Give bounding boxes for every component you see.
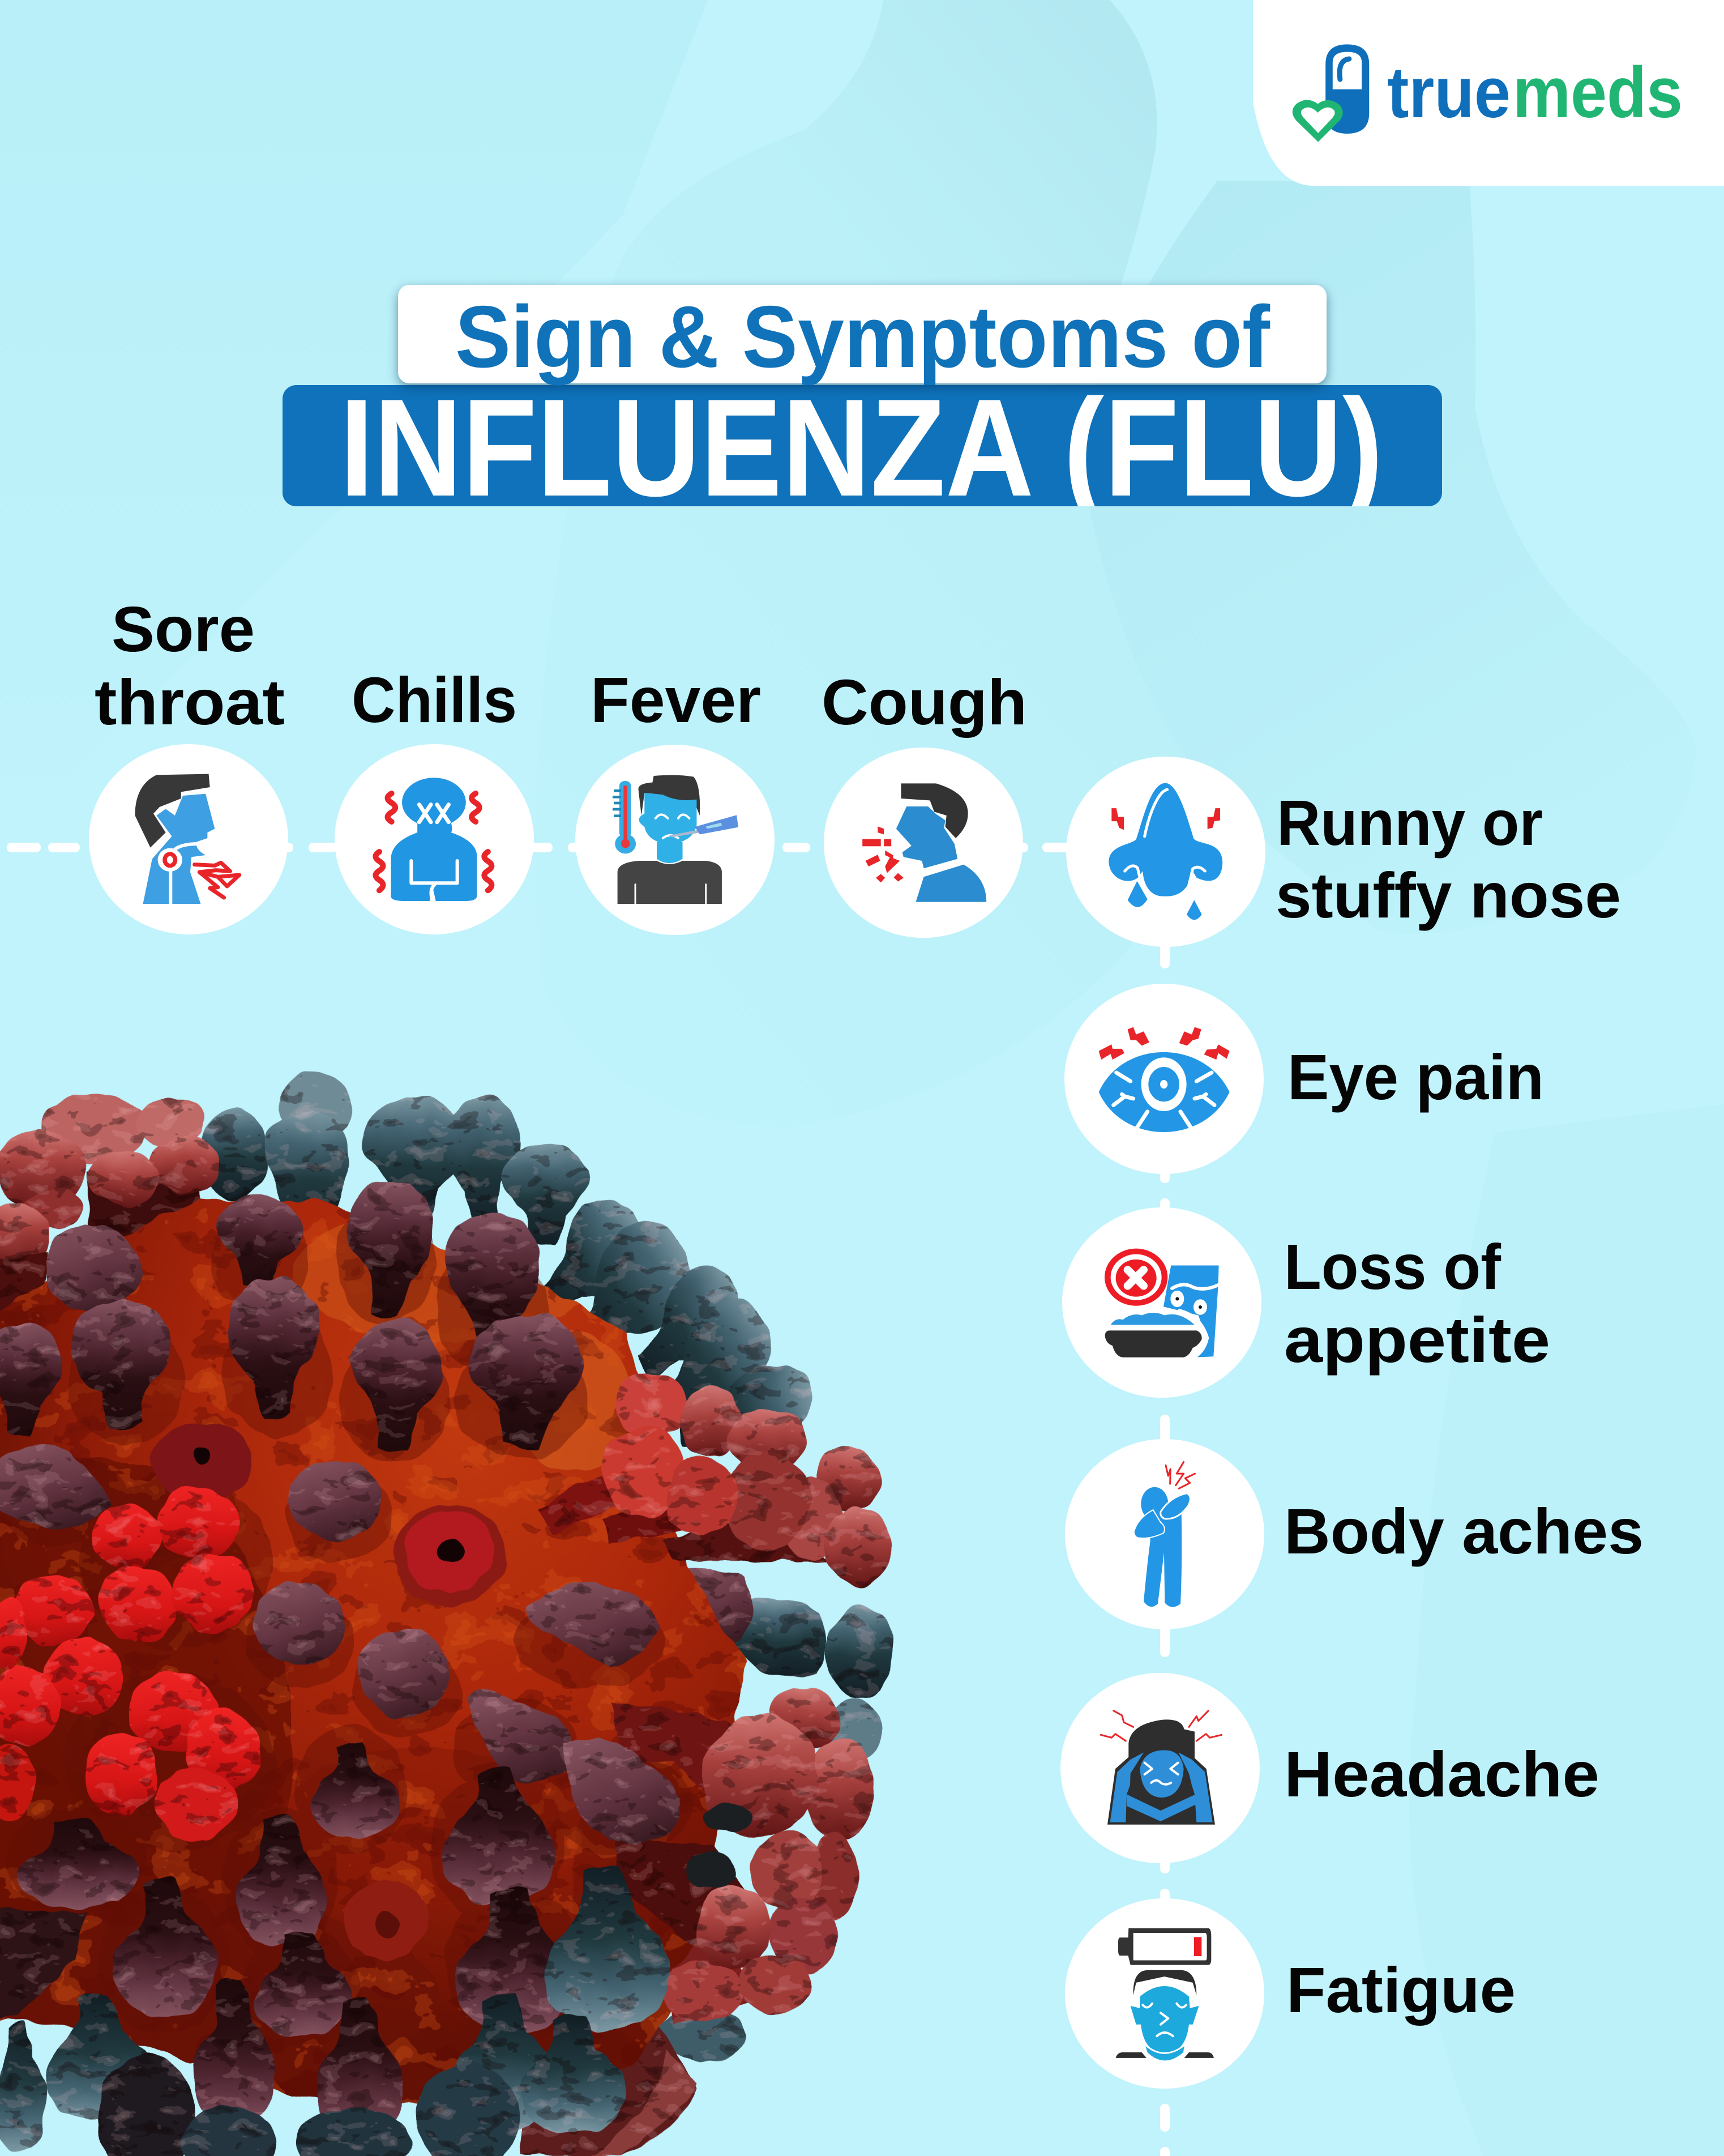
label: loss of appetite: Loss of (1284, 1231, 1501, 1303)
icon: runny nose (1109, 783, 1222, 920)
virus illustration (0, 1073, 893, 2156)
label: chills: Chills (352, 664, 517, 736)
symptom: headache (1060, 1673, 1599, 1863)
icon: person with headache (1101, 1711, 1222, 1825)
symptom: fever (575, 664, 775, 935)
label: loss of appetite: appetite (1284, 1304, 1550, 1376)
right spike cluster (538, 1372, 892, 1585)
title banner (283, 285, 1442, 525)
symptom: cough (822, 667, 1027, 938)
purple spikes (0, 1181, 682, 2156)
label: fatigue: Fatigue (1286, 1954, 1516, 2026)
logo panel (1253, 0, 1724, 186)
pores (151, 1422, 506, 1962)
logo wordmark: true (1387, 52, 1511, 133)
logo wordmark: meds (1513, 52, 1683, 133)
label: runny or stuffy nose: Runny or (1277, 787, 1543, 859)
logo wordmark (1387, 52, 1683, 133)
label: headache: Headache (1284, 1739, 1599, 1810)
icon: tired person with low battery (1116, 1928, 1214, 2060)
symptom: body aches (1065, 1439, 1644, 1629)
icon: person with thermometer (613, 775, 738, 904)
label: fever: Fever (591, 664, 761, 736)
label: cough: Cough (822, 667, 1027, 738)
icon: food and water crossed out (1105, 1249, 1219, 1357)
symptom: fatigue (1065, 1898, 1516, 2089)
symptom: runny or stuffy nose (1066, 757, 1621, 947)
subtitle box: Sign & Symptoms of (455, 288, 1270, 386)
shadows cast on body (0, 1196, 693, 2048)
icon: painful eye (1099, 1027, 1230, 1132)
icon: coughing profile (862, 783, 986, 902)
symptom: chills (335, 664, 534, 934)
symptom: eye pain (1064, 984, 1544, 1174)
label: eye pain: Eye pain (1287, 1041, 1544, 1113)
label: loss of appetite (1284, 1231, 1550, 1376)
label: runny or stuffy nose (1276, 787, 1621, 931)
symptom: loss of appetite (1062, 1207, 1550, 1398)
label: sore throat: throat (95, 667, 285, 738)
back spikes: teal and grey (200, 1073, 893, 2156)
dashed connector lines (7, 843, 1170, 2156)
icon: throat profile (135, 774, 239, 904)
virus body (0, 1199, 748, 2108)
label: runny or stuffy nose: stuffy nose (1276, 860, 1621, 931)
label: body aches: Body aches (1284, 1496, 1644, 1567)
bright red spike heads (0, 1487, 260, 1839)
lower right spike cluster (611, 1687, 874, 2023)
icon: shivering person (375, 778, 491, 901)
label: sore throat: Sore (112, 594, 255, 665)
main title bar: INFLUENZA (FLU) (340, 370, 1383, 525)
icon: person holding shoulder (1134, 1462, 1195, 1607)
symptom: sore throat (89, 594, 288, 934)
logo icon: capsule and heart (1293, 44, 1369, 142)
label: sore throat (95, 594, 285, 738)
top-left spike cluster (0, 1094, 223, 1330)
